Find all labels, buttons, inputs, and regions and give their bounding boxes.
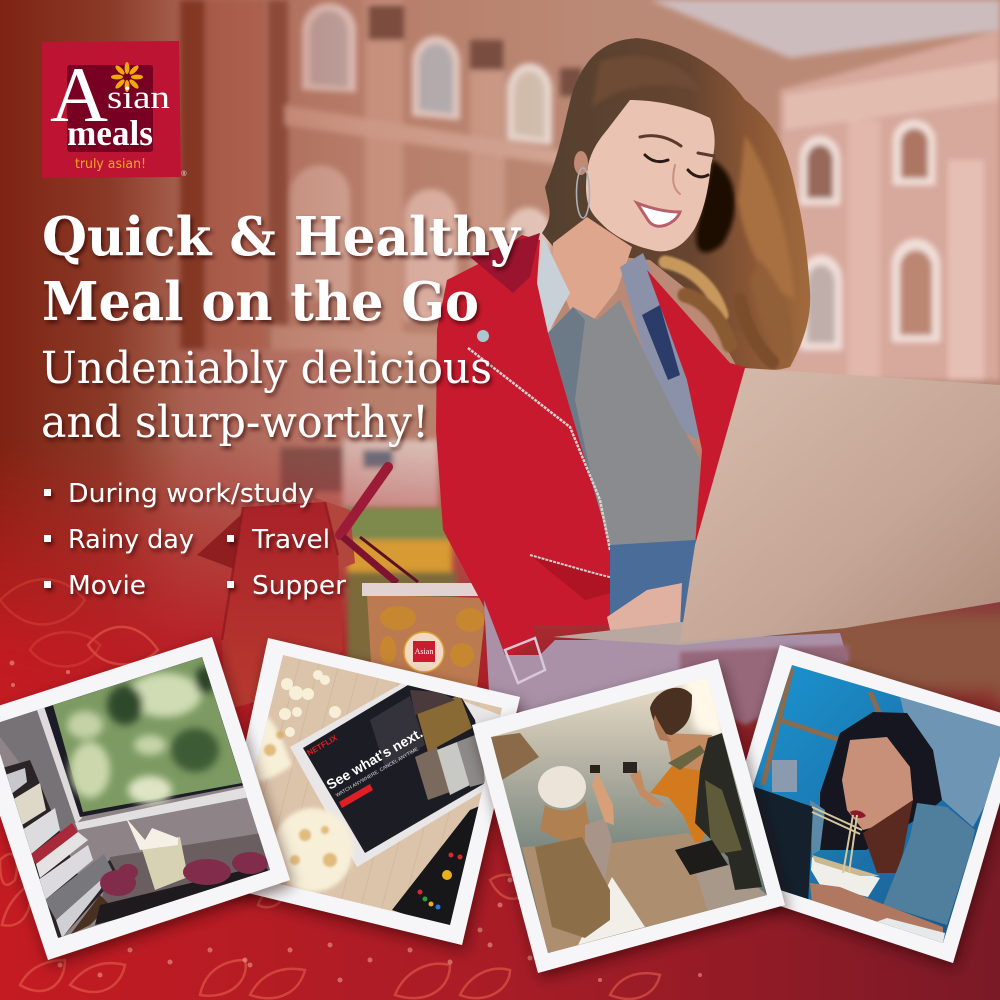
legs <box>484 600 848 725</box>
logo: Asian Meals: meals <box>67 113 153 153</box>
earring <box>576 168 590 218</box>
laptop lid <box>680 368 1000 642</box>
dried flowers <box>95 865 272 925</box>
logo: Asian Meals: sian <box>107 80 170 116</box>
photo: movie night with tablet: NETFLIX <box>306 733 339 758</box>
bullet list: occasions: Supper <box>252 571 346 601</box>
shirt <box>548 300 700 548</box>
bullet list: occasions: Travel <box>251 525 330 555</box>
plaid shirt right <box>620 253 705 440</box>
title: Quick & Healthy <box>42 206 522 268</box>
illustration: woman with laptop <box>436 38 1000 725</box>
hair highlights <box>592 56 795 362</box>
logo: Asian Meals <box>42 41 187 178</box>
woman traveller <box>538 766 586 808</box>
rocky ground <box>522 833 770 955</box>
photo: study and noodles <box>710 645 1000 963</box>
jacket right panel <box>647 270 748 548</box>
neck <box>552 217 632 322</box>
jacket left panel <box>436 235 650 657</box>
building windows <box>290 3 940 350</box>
logo: Asian Meals: truly asian! <box>75 157 146 172</box>
photo: travellers at the sea <box>472 659 785 973</box>
eyes and brows <box>640 136 714 194</box>
logo: Asian Meals: ® <box>181 170 187 178</box>
laptop base <box>553 622 845 645</box>
zipper <box>468 348 610 550</box>
title <box>42 206 522 333</box>
bullet list: occasions <box>44 479 346 601</box>
subtitle: Undeniably delicious <box>41 343 492 394</box>
tablet <box>290 680 500 867</box>
hand <box>607 583 682 630</box>
hair <box>542 38 810 370</box>
illustration: red handbag <box>197 467 418 710</box>
title: Meal on the Go <box>42 271 479 333</box>
photo: rainy window <box>0 637 290 960</box>
star anise icon <box>111 62 143 92</box>
remote <box>392 805 482 930</box>
background pattern: paisley and dots <box>0 579 660 999</box>
skirt <box>578 877 645 945</box>
illustration: instant noodle cup: Asian <box>415 647 433 656</box>
ear <box>574 151 588 175</box>
face <box>586 100 715 251</box>
jeans <box>610 540 700 640</box>
bullet list: occasions: During work/study <box>68 479 314 509</box>
book stack <box>0 760 118 940</box>
bullet list: occasions: Rainy day <box>68 525 194 555</box>
subtitle: and slurp-worthy! <box>41 397 429 448</box>
buckle strap <box>505 638 545 683</box>
hair curls <box>665 262 772 362</box>
candle <box>140 837 188 890</box>
man <box>666 734 712 771</box>
illustration: instant noodle cup <box>362 583 493 690</box>
bullet list: occasions: Movie <box>68 571 146 601</box>
logo: Asian Meals: A <box>50 51 108 138</box>
popcorn <box>253 670 353 892</box>
photo: movie night with tablet <box>215 638 520 945</box>
mouth <box>637 203 680 226</box>
plaid shirt left <box>537 237 570 333</box>
photo: movie night with tablet: WATCH ANYWHERE. CANCEL ANYTIME. <box>335 746 421 799</box>
photo: movie night with tablet: See what's next. <box>324 725 425 793</box>
cliff <box>491 733 539 780</box>
subtitle <box>41 343 492 448</box>
